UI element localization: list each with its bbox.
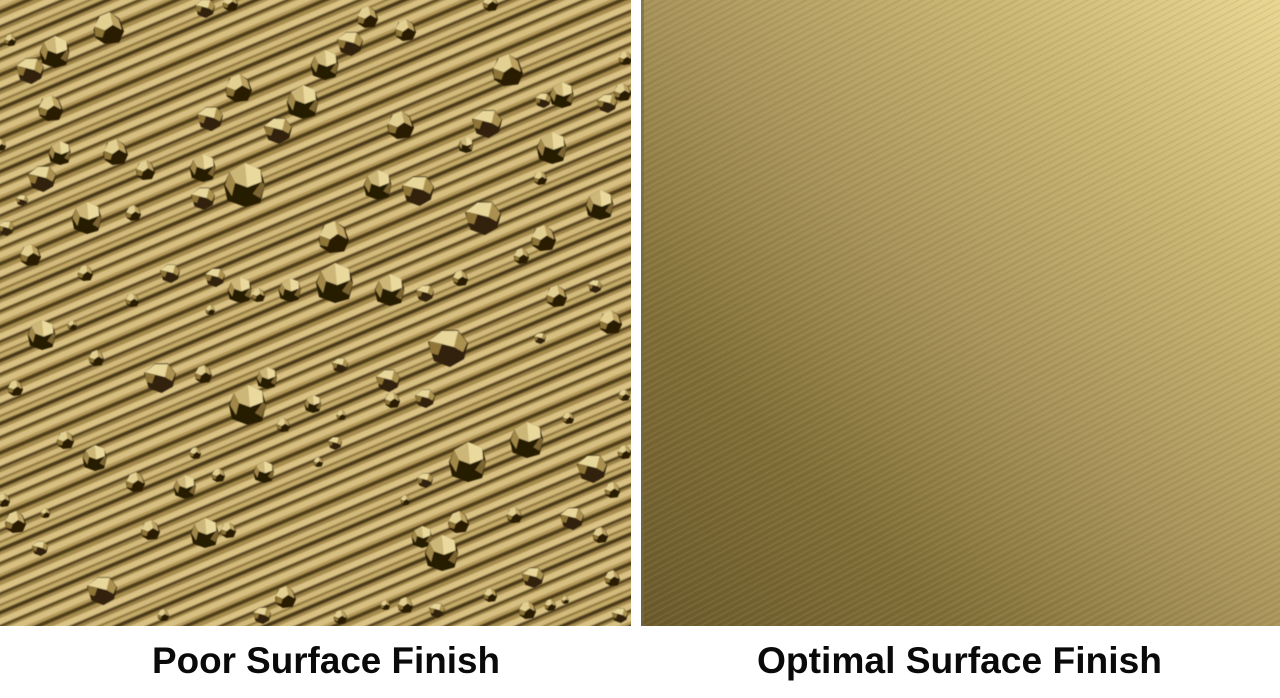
heading: optimal surface finish: Optimal Surface Finish	[757, 640, 1162, 681]
panel: optimal surface finish	[641, 0, 1280, 626]
heading: poor surface finish: Poor Surface Finish	[152, 640, 500, 681]
panel: poor surface finish	[0, 0, 636, 630]
rough surface particles	[0, 0, 632, 624]
grooved metal surface	[0, 0, 636, 630]
